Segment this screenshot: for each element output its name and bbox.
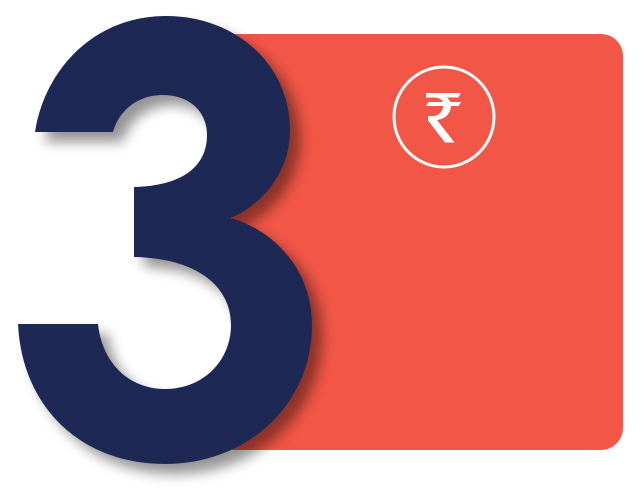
icon: rupee in circle	[394, 67, 494, 167]
rupee symbol	[426, 93, 461, 142]
shadow of number 3	[28, 26, 322, 474]
icon ring	[394, 67, 494, 167]
panel: red card	[232, 34, 623, 450]
large number 3	[18, 16, 312, 464]
